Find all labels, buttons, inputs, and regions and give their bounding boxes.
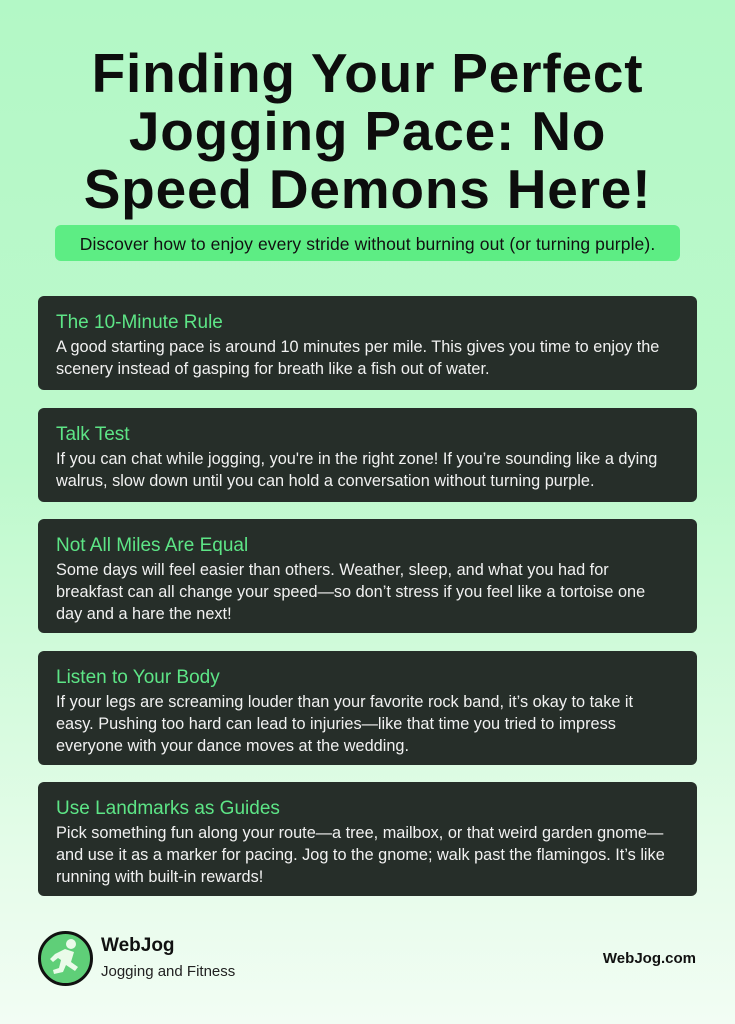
panel: not all miles are equal bbox=[38, 519, 697, 633]
panel: listen to your body bbox=[38, 651, 697, 765]
panel: landmarks bbox=[38, 782, 697, 896]
title: Finding Your Perfect bbox=[92, 42, 643, 104]
website: WebJog.com bbox=[603, 950, 696, 967]
panel: not all miles are equal: day and a hare the next! bbox=[56, 605, 232, 623]
panel: listen to your body: If your legs are screaming louder than your favorite rock band, it’s okay to take it bbox=[56, 693, 633, 711]
panel: 10-minute rule bbox=[38, 296, 697, 390]
panel: talk test bbox=[38, 408, 697, 502]
subtitle banner: Discover how to enjoy every stride without burning out (or turning purple). bbox=[80, 234, 655, 254]
panel: landmarks: running with built-in rewards! bbox=[56, 868, 263, 886]
panel: not all miles are equal: breakfast can all change your speed—so don’t stress if you feel like a tortoise one bbox=[56, 583, 645, 601]
panel: 10-minute rule: A good starting pace is around 10 minutes per mile. This gives you time to enjoy the bbox=[56, 338, 659, 356]
panel: talk test: Talk Test bbox=[56, 424, 130, 445]
panel: 10-minute rule: scenery instead of gasping for breath like a fish out of water. bbox=[56, 360, 490, 378]
panel: listen to your body: everyone with your dance moves at the wedding. bbox=[56, 737, 409, 755]
tagline: Jogging and Fitness bbox=[101, 963, 235, 980]
brand name: WebJog bbox=[101, 935, 175, 956]
icon: logo runner bbox=[38, 931, 93, 986]
title: Jogging Pace: No bbox=[129, 100, 606, 162]
title bbox=[84, 42, 651, 220]
panel: not all miles are equal: Not All Miles Are Equal bbox=[56, 535, 248, 556]
panel: listen to your body: Listen to Your Body bbox=[56, 667, 220, 688]
panel: landmarks: and use it as a marker for pacing. Jog to the gnome; walk past the flamingos. It’s like bbox=[56, 846, 665, 864]
title: Speed Demons Here! bbox=[84, 158, 651, 220]
panel: 10-minute rule: The 10-Minute Rule bbox=[56, 312, 223, 333]
panel: landmarks: Use Landmarks as Guides bbox=[56, 798, 280, 819]
panel: not all miles are equal: Some days will feel easier than others. Weather, sleep, and what you had for bbox=[56, 561, 609, 579]
panel: listen to your body: easy. Pushing too hard can lead to injuries—like that time you tried to impress bbox=[56, 715, 616, 733]
panel: talk test: If you can chat while jogging, you're in the right zone! If you’re sounding like a dying bbox=[56, 450, 657, 468]
panel: landmarks: Pick something fun along your route—a tree, mailbox, or that weird garden gnome— bbox=[56, 824, 663, 842]
subtitle banner bbox=[55, 225, 680, 261]
panel: talk test: walrus, slow down until you can hold a conversation without turning purple. bbox=[56, 472, 594, 490]
